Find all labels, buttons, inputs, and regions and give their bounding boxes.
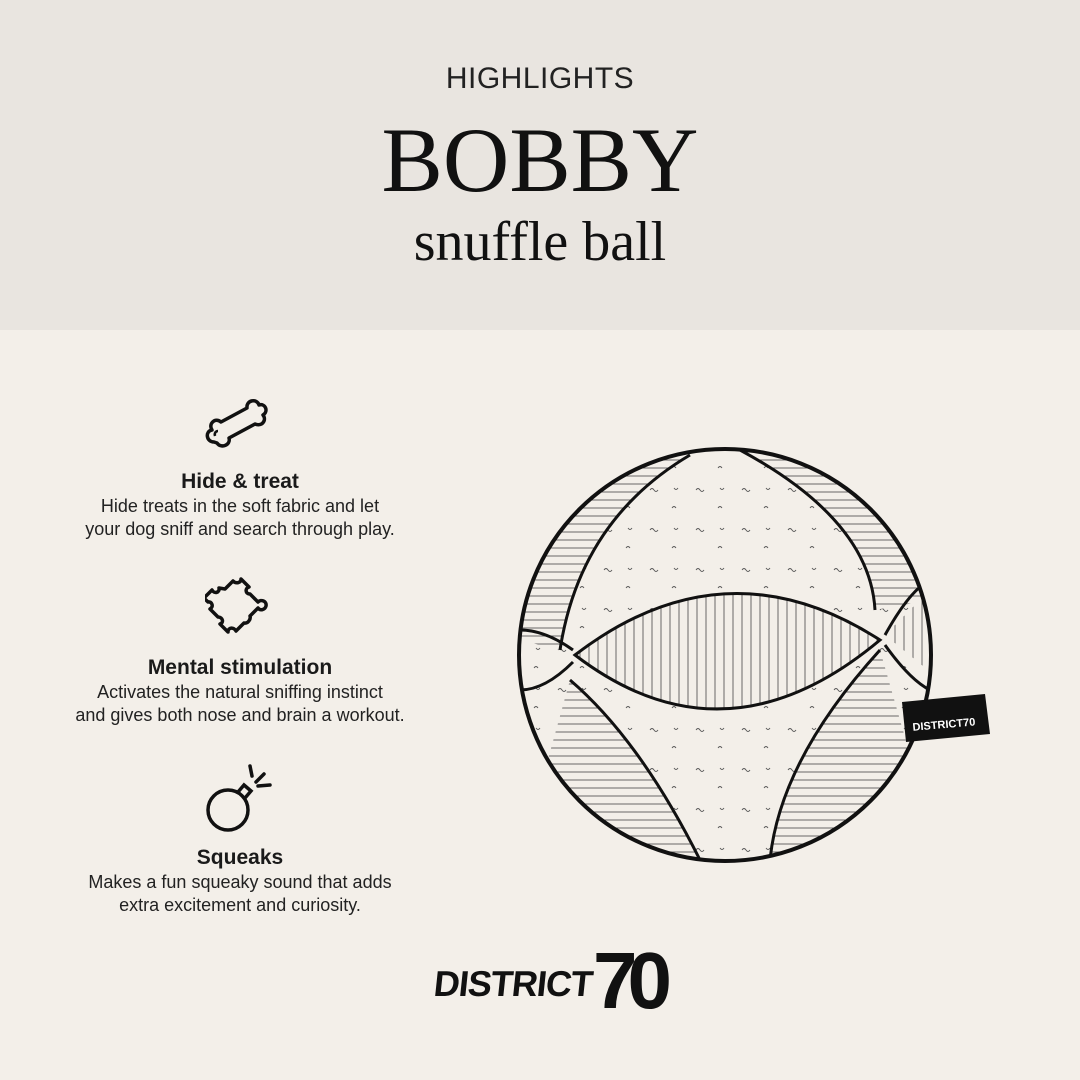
- tag: district70 label: [902, 694, 990, 742]
- tag: district70 label: DISTRICT70: [912, 716, 976, 734]
- feature: mental stimulation: [75, 577, 405, 725]
- logo: District70: 70: [593, 936, 662, 1025]
- icon: bone: [206, 399, 268, 448]
- icon: squeaker bomb: [206, 764, 272, 832]
- header band: [0, 0, 1080, 330]
- feature: squeaks: Makes a fun squeaky sound that adds: [88, 872, 392, 892]
- illustration: snuffle ball: [517, 447, 990, 863]
- feature: squeaks: [88, 764, 392, 915]
- feature: mental stimulation: Activates the natural sniffing instinct: [97, 682, 383, 702]
- feature: hide & treat: Hide & treat: [181, 470, 299, 493]
- logo: District70: DISTRICT: [432, 963, 594, 1004]
- title: BOBBY: BOBBY: [382, 109, 698, 211]
- subtitle: snuffle ball: [414, 211, 666, 273]
- feature: squeaks: Squeaks: [197, 846, 283, 869]
- feature: hide & treat: your dog sniff and search through play.: [85, 519, 395, 539]
- feature: hide & treat: Hide treats in the soft fabric and let: [101, 496, 379, 516]
- feature: mental stimulation: and gives both nose and brain a workout.: [75, 705, 405, 725]
- feature: squeaks: extra excitement and curiosity.: [119, 895, 361, 915]
- icon: puzzle piece: [205, 577, 268, 634]
- feature: hide & treat: [85, 399, 395, 539]
- feature: mental stimulation: Mental stimulation: [148, 656, 332, 679]
- logo: District70: [432, 936, 669, 1025]
- eyebrow: highlights: HIGHLIGHTS: [446, 62, 634, 95]
